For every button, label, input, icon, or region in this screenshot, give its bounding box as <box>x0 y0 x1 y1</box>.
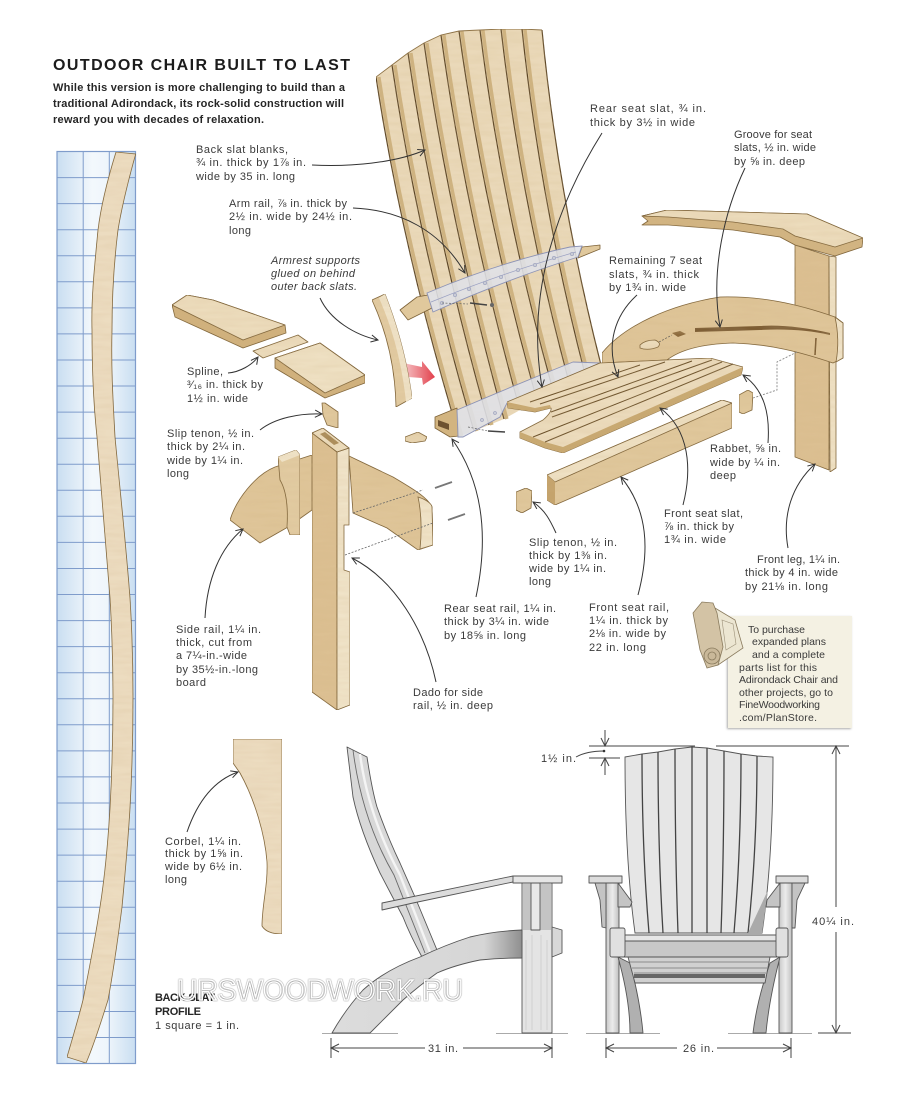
far side rail <box>602 297 843 363</box>
ground shadow lines <box>322 1032 568 1034</box>
intro paragraph: While this version is more challenging to build than a <box>53 82 346 94</box>
label: front leg: Front leg, 1¼ in. <box>757 554 840 566</box>
label: groove: slats, ½ in. wide <box>734 142 816 154</box>
label: lower slip tenon: wide by 1¼ in. <box>528 563 606 575</box>
label: side rail: Side rail, 1¼ in. <box>176 624 261 636</box>
label: groove <box>734 129 816 168</box>
spline <box>253 335 308 358</box>
label: front seat slat <box>664 508 743 546</box>
watermark: URSWOODWORK.RU <box>177 975 463 1007</box>
title: OUTDOOR CHAIR BUILT TO LAST <box>53 57 350 74</box>
label: spline: 1½ in. wide <box>187 393 248 405</box>
label: corbel: wide by 6½ in. <box>164 861 242 873</box>
label: spline: ³⁄₁₆ in. thick by <box>187 379 264 391</box>
label: rear seat slat: thick by 3½ in wide <box>590 117 695 129</box>
front seat rail <box>547 400 732 505</box>
dimension: 1 1/2 in.: 1½ in. <box>541 753 576 765</box>
label: dado <box>413 687 493 712</box>
far slip tenon <box>739 390 753 414</box>
label: lower slip tenon: long <box>529 576 551 588</box>
back slat full-size profile <box>67 152 136 1063</box>
seat slats <box>507 358 743 453</box>
label: dado: Dado for side <box>413 687 483 699</box>
dimension: 40 1/4 in. <box>812 746 854 1033</box>
front view seat <box>610 928 788 983</box>
label: remaining seat slats: by 1¾ in. wide <box>609 282 686 294</box>
label: front seat rail: 1¼ in. thick by <box>589 615 668 627</box>
callout text: To purchase <box>748 624 805 636</box>
near front leg <box>312 428 350 710</box>
near arm rail pieces <box>172 295 365 428</box>
label: front seat rail: Front seat rail, <box>589 602 669 614</box>
side view rail <box>332 927 562 1033</box>
dashed assembly line: far tenon to far rail <box>753 352 797 398</box>
label: corbel: Corbel, 1¼ in. <box>165 836 241 848</box>
label: armrest supports <box>270 255 360 293</box>
label: lower slip tenon: Slip tenon, ½ in. <box>529 537 617 549</box>
label: rabbet: Rabbet, ⅝ in. <box>710 443 781 455</box>
arm rear section <box>172 295 286 348</box>
label: remaining seat slats: Remaining 7 seat <box>609 255 702 267</box>
label: armrest supports: outer back slats. <box>271 281 357 293</box>
label: side rail: a 7¼-in.-wide <box>176 650 247 662</box>
icon: scroll <box>693 602 743 668</box>
callout text: parts list for this <box>739 662 817 674</box>
label: back-slat profile: PROFILE <box>155 1006 201 1018</box>
upper slip tenon <box>322 403 338 428</box>
label: side rail: by 35½-in.-long <box>176 664 258 676</box>
red assembly arrow <box>403 361 435 385</box>
label: rabbet <box>709 443 781 482</box>
side view arm <box>382 876 562 910</box>
label: upper slip tenon: Slip tenon, ½ in. <box>167 428 254 440</box>
label: armrest supports: glued on behind <box>271 268 356 280</box>
callout: plan store <box>693 602 852 728</box>
label: back slat blanks: ¾ in. thick by 1⅞ in. <box>196 157 306 169</box>
label: upper slip tenon <box>166 428 254 480</box>
label: remaining seat slats: slats, ¾ in. thick <box>609 269 700 281</box>
label: rabbet: deep <box>710 470 736 482</box>
label: rear seat rail <box>444 603 556 642</box>
front view curved rails <box>618 957 780 1033</box>
label: rear seat rail: Rear seat rail, 1¼ in. <box>444 603 556 615</box>
label: upper slip tenon: wide by 1¼ in. <box>166 455 243 467</box>
label: corbel <box>164 836 243 886</box>
small tenon near rear rail <box>405 432 427 443</box>
screws and dashed lines, near rail <box>345 482 465 555</box>
label: remaining seat slats <box>609 255 702 294</box>
label: rear seat rail: thick by 3¼ in. wide <box>444 616 549 628</box>
far arm rail <box>642 210 863 256</box>
label: corbel: long <box>165 874 187 886</box>
callout text: and a complete <box>752 649 825 661</box>
label: groove: by ⅝ in. deep <box>734 156 805 168</box>
label: back slat blanks: wide by 35 in. long <box>195 171 295 183</box>
label: side rail <box>176 624 261 689</box>
label: rear seat rail: by 18⅝ in. long <box>444 630 526 642</box>
side view leg <box>522 883 552 1033</box>
label: back slat blanks <box>195 144 306 183</box>
front elevation view <box>586 747 812 1034</box>
label: side rail: board <box>176 677 206 689</box>
label: dado: rail, ½ in. deep <box>413 700 493 712</box>
rear seat rail with translucent band <box>435 362 600 437</box>
front view arms and corbels <box>589 876 808 928</box>
dimension: 31 in. <box>331 1038 552 1058</box>
label: upper slip tenon: long <box>167 468 189 480</box>
label: back-slat profile <box>155 992 239 1032</box>
front view back slats <box>625 747 773 933</box>
callout text: .com/PlanStore. <box>739 712 817 724</box>
dimension: 26 in. <box>606 1038 791 1058</box>
arm rail crossing back (translucent) <box>400 245 600 320</box>
lower slip tenon <box>516 488 532 513</box>
side elevation view <box>322 747 568 1034</box>
near side rail <box>230 455 433 550</box>
label: spline: Spline, <box>187 366 223 378</box>
callout text: other projects, go to <box>739 687 833 699</box>
label: arm rail: 2½ in. wide by 24½ in. <box>229 211 352 223</box>
callout text: FineWoodworking <box>739 699 820 711</box>
back slats assembly <box>376 29 601 436</box>
label: corbel: thick by 1⅝ in. <box>165 848 243 860</box>
armrest support <box>372 294 412 407</box>
callout text: Adirondack Chair and <box>739 674 838 686</box>
label: front seat slat: 1¾ in. wide <box>664 534 726 546</box>
intro paragraph <box>53 82 346 126</box>
label: lower slip tenon <box>528 537 617 588</box>
label: side rail: thick, cut from <box>176 637 252 649</box>
label: front seat rail: 22 in. long <box>589 642 646 654</box>
back-slat profile grid with slat <box>57 152 136 1064</box>
label: spline <box>187 366 264 405</box>
dimension: 1 1/2 in. <box>541 730 849 775</box>
label: front seat rail: 2⅛ in. wide by <box>589 628 666 640</box>
label: front seat rail <box>589 602 669 654</box>
label: upper slip tenon: thick by 2¼ in. <box>167 441 245 453</box>
label: back-slat profile: 1 square = 1 in. <box>155 1020 239 1032</box>
label: front leg: thick by 4 in. wide <box>745 567 838 579</box>
label: front leg: by 21⅛ in. long <box>745 581 828 593</box>
intro paragraph: traditional Adirondack, its rock-solid construction will <box>53 98 344 110</box>
intro paragraph: reward you with decades of relaxation. <box>53 114 264 126</box>
callout text: expanded plans <box>752 636 826 648</box>
label: arm rail: long <box>229 225 251 237</box>
label: back slat blanks: Back slat blanks, <box>196 144 288 156</box>
callout text <box>739 624 838 724</box>
front view legs <box>606 883 792 1033</box>
exploded: far side rail and front leg assembly <box>602 210 863 472</box>
dimension: 26 in.: 26 in. <box>683 1043 714 1055</box>
label: rear seat slat <box>590 103 706 129</box>
corbel profile <box>233 739 282 934</box>
dimension: 31 in.: 31 in. <box>428 1043 458 1055</box>
label: front seat slat: Front seat slat, <box>664 508 743 520</box>
label: groove: Groove for seat <box>734 129 812 141</box>
label: front seat slat: ⅞ in. thick by <box>664 521 734 533</box>
label: lower slip tenon: thick by 1⅜ in. <box>529 550 607 562</box>
label: rear seat slat: Rear seat slat, ¾ in. <box>590 103 706 115</box>
label: arm rail <box>229 198 352 237</box>
label: front leg <box>745 554 840 593</box>
label: arm rail: Arm rail, ⅞ in. thick by <box>229 198 348 210</box>
dimension: 40 1/4 in.: 40¼ in. <box>812 916 854 928</box>
arm front section <box>275 343 365 398</box>
label: back-slat profile: BACK-SLAT <box>155 992 215 1004</box>
corbel beside near rail <box>278 450 300 535</box>
leader lines <box>187 133 815 832</box>
label: armrest supports: Armrest supports <box>270 255 360 267</box>
label: rabbet: wide by ¼ in. <box>709 457 780 469</box>
far front leg <box>795 245 836 472</box>
ground shadow <box>586 1032 812 1034</box>
side view back slats <box>347 747 437 957</box>
